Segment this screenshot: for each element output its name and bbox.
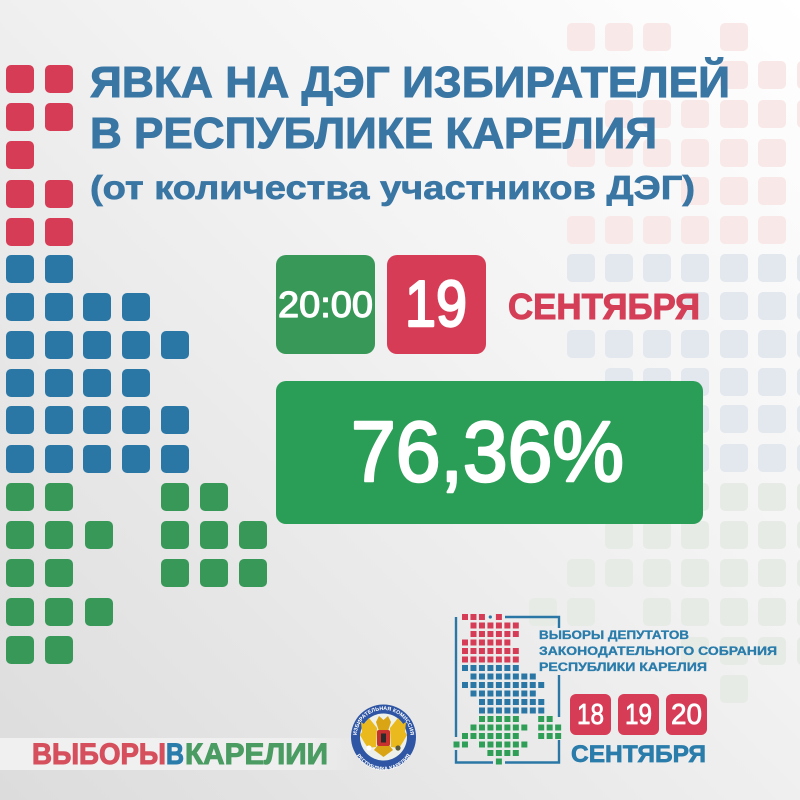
elections logo: dates	[570, 694, 707, 735]
title	[90, 56, 730, 158]
turnout panel: 76,36%	[351, 405, 624, 500]
footer band	[0, 738, 360, 770]
elections logo: heading: ЗАКОНОДАТЕЛЬНОГО СОБРАНИЯ	[539, 646, 777, 658]
elections logo: month: СЕНТЯБРЯ	[571, 741, 706, 768]
faint map pattern	[529, 23, 800, 703]
title: ЯВКА НА ДЭГ ИЗБИРАТЕЛЕЙ	[90, 56, 730, 107]
date badge: 19	[405, 267, 467, 340]
elections logo: map	[454, 615, 561, 762]
election commission seal: РЕСПУБЛИКА КАРЕЛИЯ	[356, 754, 410, 770]
title: В РЕСПУБЛИКЕ КАРЕЛИЯ	[90, 109, 657, 158]
elections logo: dates: 19	[625, 699, 652, 731]
brand wordmark: КАРЕЛИИ	[185, 738, 328, 771]
elections logo: dates: 18	[577, 699, 604, 731]
time badge: 20:00	[278, 284, 373, 325]
turnout panel	[276, 381, 703, 524]
subtitle: (от количества участников ДЭГ)	[90, 169, 695, 206]
elections logo: heading	[539, 630, 777, 674]
time badge	[276, 255, 375, 354]
left map: blue squares	[6, 255, 189, 473]
date badge	[387, 255, 486, 354]
election commission seal: ИЗБИРАТЕЛЬНАЯ КОМИССИЯ	[352, 706, 414, 735]
brand wordmark	[32, 738, 328, 771]
elections logo: heading: ВЫБОРЫ ДЕПУТАТОВ	[539, 630, 689, 642]
brand wordmark: В	[166, 738, 184, 771]
left map: red squares	[6, 65, 73, 246]
month label: СЕНТЯБРЯ	[508, 286, 700, 327]
election commission seal	[351, 704, 416, 770]
left map: green squares	[6, 483, 267, 664]
brand wordmark: ВЫБОРЫ	[32, 738, 166, 771]
elections logo: heading: РЕСПУБЛИКИ КАРЕЛИЯ	[539, 662, 707, 674]
elections logo: dates: 20	[671, 699, 702, 731]
